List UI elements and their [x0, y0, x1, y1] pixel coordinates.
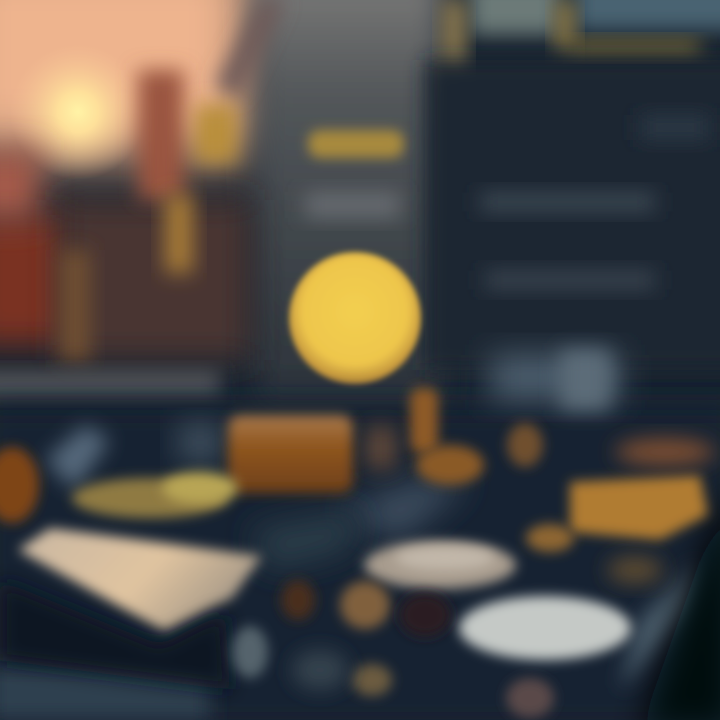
dark tray edge — [0, 580, 230, 690]
small pastries centre — [365, 388, 543, 485]
yellow ball — [289, 252, 421, 384]
lower table — [0, 350, 720, 720]
bread left edge — [0, 447, 39, 523]
dark chalkboard panel — [305, 60, 720, 370]
sky and backdrop — [0, 0, 720, 410]
horizontal ledge — [0, 372, 220, 396]
bread right — [526, 438, 715, 584]
small items foreground — [232, 626, 554, 718]
yellow plate left — [72, 472, 238, 518]
bread loaf centre — [228, 415, 353, 493]
plate centre — [364, 541, 516, 589]
golden streaks — [165, 0, 700, 273]
sun — [10, 44, 146, 180]
white plate right — [459, 596, 631, 660]
cream tray left — [18, 528, 262, 632]
red-brown buildings on the left — [0, 0, 285, 360]
pastry and cup — [281, 580, 451, 637]
